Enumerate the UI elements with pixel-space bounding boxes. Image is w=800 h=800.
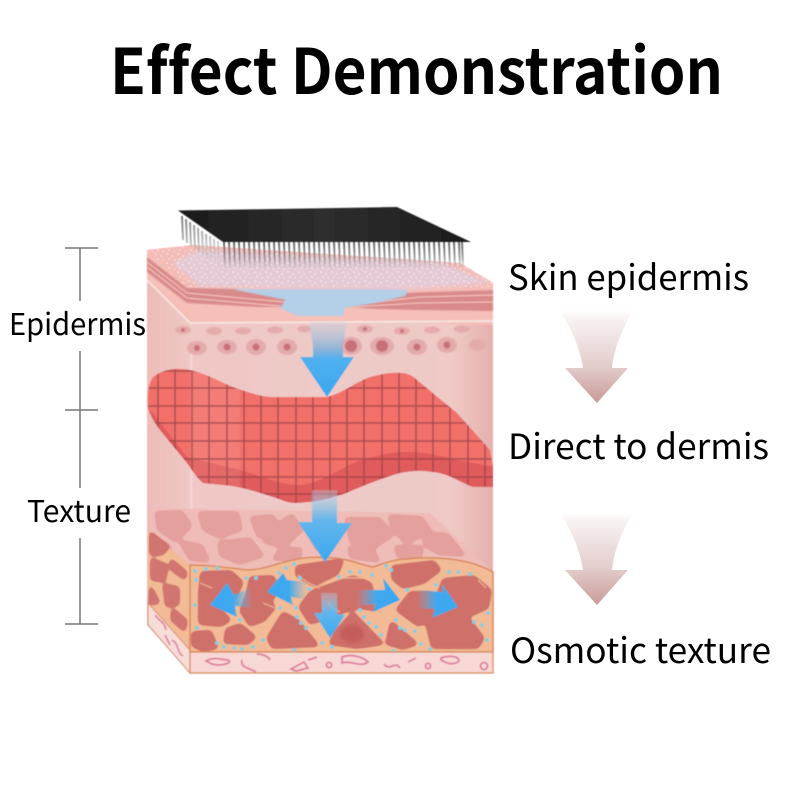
epidermis surface [147, 245, 493, 325]
bottom tissue strip [190, 652, 493, 673]
needles: front edge [224, 242, 463, 268]
scale bar lines [65, 248, 98, 624]
arrow: blue arrow into dermis [300, 322, 354, 397]
glass side strip [190, 350, 192, 565]
arrow: small blue arrow far right [418, 584, 458, 618]
tissue cells [192, 559, 491, 651]
arrow: small blue arrow upper left [267, 573, 307, 605]
texture top face, mottled [148, 508, 493, 572]
blue dots [193, 562, 490, 653]
label: Skin epidermis: Skin epidermis [508, 250, 749, 301]
left face lower strip [148, 603, 190, 673]
arrow: small blue arrow down [314, 593, 345, 638]
speckled top face [147, 245, 493, 290]
skin cross-section illustration [140, 207, 500, 673]
pale cell streaks [200, 575, 486, 612]
epidermal cells [175, 325, 485, 355]
dermis underside shadow [148, 408, 493, 503]
needles: left edge [182, 216, 219, 264]
label: Epidermis: Epidermis [9, 300, 146, 344]
pink layer under stratum [147, 245, 493, 325]
pale basal line [147, 280, 493, 323]
left side face of cell layer [148, 530, 190, 673]
dermis mesh layer [147, 368, 494, 504]
title: Effect Demonstration [110, 22, 723, 113]
arrow: small blue arrow right [357, 578, 400, 612]
arrow: small blue arrow left [210, 583, 252, 617]
scale bar with layer labels [9, 248, 146, 624]
arrow: fading arrow 2 [560, 512, 633, 605]
label: Direct to dermis: Direct to dermis [508, 419, 769, 470]
front cell layer [190, 557, 493, 673]
label: Osmotic texture: Osmotic texture [510, 623, 771, 674]
blue wash in stratum [232, 289, 408, 316]
stratum stripes [147, 257, 285, 307]
label: Texture: Texture [27, 487, 131, 531]
icon: microneedle patch [178, 207, 471, 268]
dark spot [340, 625, 364, 643]
arrow: blue arrow into texture [298, 490, 352, 562]
arrow: fading arrow 1 [560, 310, 633, 403]
skin block body [147, 245, 493, 673]
pale blue lilac surface tint [172, 250, 490, 290]
patch plate [178, 207, 471, 242]
